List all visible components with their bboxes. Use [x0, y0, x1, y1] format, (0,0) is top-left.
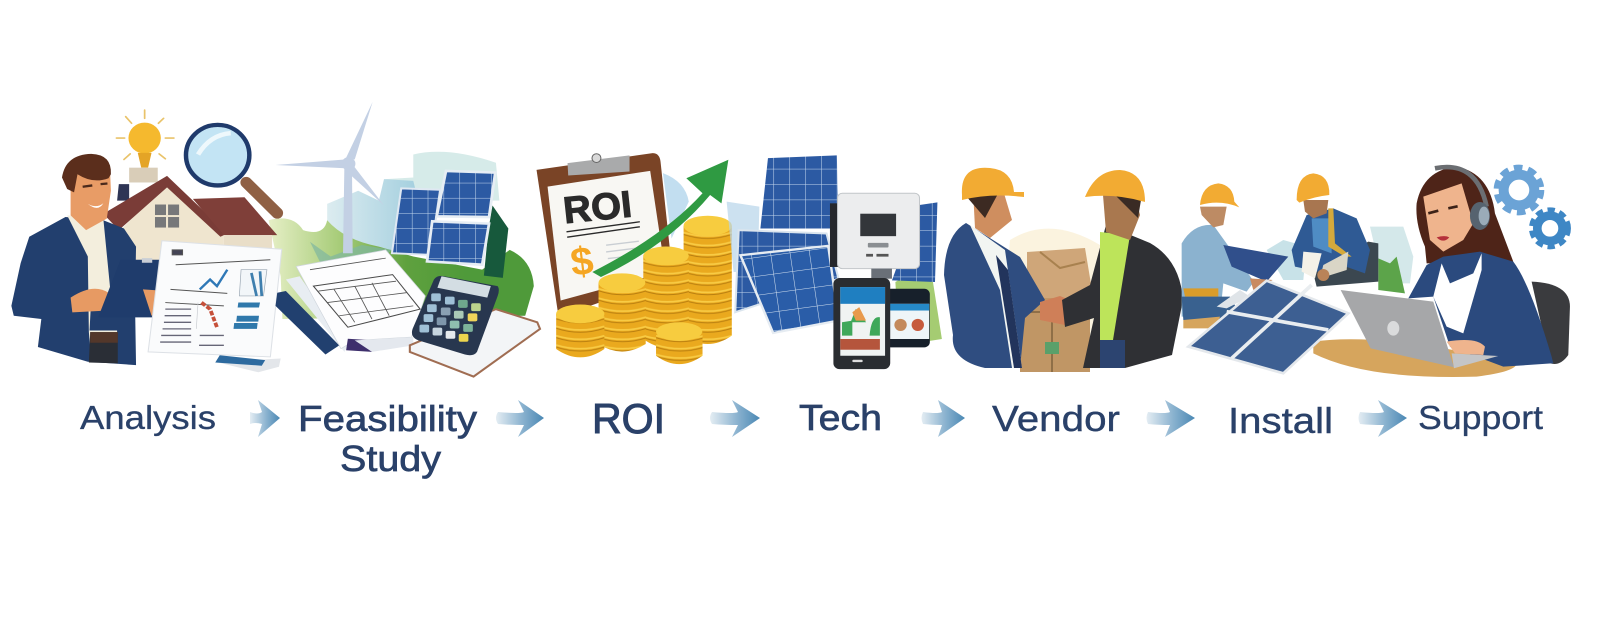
arrow 1	[250, 400, 280, 437]
panel: vendor illustration	[944, 168, 1183, 372]
label: Install: Install	[1228, 400, 1333, 441]
icon: light bulb sun	[116, 110, 174, 168]
icon: magnifying glass	[186, 125, 277, 213]
solar panel on table	[1188, 281, 1348, 373]
panel: analysis and feasibility illustrations	[11, 102, 540, 377]
handshake	[1040, 296, 1082, 325]
arrow 6	[1358, 400, 1407, 437]
smartphone with dashboard	[833, 278, 890, 369]
man in suit with hard hat	[944, 168, 1045, 368]
round wooden table	[1183, 317, 1517, 377]
woman with headset	[1408, 167, 1553, 367]
background wash	[1000, 229, 1100, 360]
panel: ROI illustration	[537, 153, 732, 364]
feasibility landscape	[269, 152, 534, 319]
arrow 2	[496, 400, 544, 437]
icon: man with clipboard	[11, 154, 174, 365]
label: Support: Support	[1418, 399, 1543, 436]
panel: tech illustration	[727, 155, 942, 369]
laptop	[1341, 290, 1498, 368]
blueprint book stack	[276, 250, 425, 355]
label: Vendor: Vendor	[992, 398, 1120, 439]
panel: install and support illustrations	[1182, 167, 1570, 377]
label: Analysis: Analysis	[80, 399, 216, 436]
label: Feasibility Study	[298, 398, 477, 479]
label: ROI: ROI	[592, 395, 665, 442]
green growth arrow	[592, 160, 728, 277]
label: Feasibility Study: Study	[340, 438, 441, 479]
icon: house	[103, 168, 277, 263]
office chair	[1532, 282, 1570, 364]
coin stacks	[556, 216, 732, 364]
small monitoring device	[885, 289, 930, 347]
man in dark jacket with hard hat	[1062, 170, 1183, 368]
icon: wind turbine	[276, 102, 384, 253]
solar panel array	[727, 155, 942, 346]
inverter box	[830, 193, 920, 279]
clipboard with ROI document	[537, 153, 689, 316]
cardboard boxes	[1020, 248, 1092, 372]
icon: calculator on notebook	[410, 276, 540, 377]
label: Feasibility Study: Feasibility	[298, 398, 477, 439]
icon: gears	[1496, 167, 1569, 247]
worker crouching with papers	[1292, 173, 1378, 287]
dollar sign: $	[568, 239, 596, 285]
icon: solar panels	[392, 171, 508, 278]
arrow 5	[1146, 400, 1195, 437]
ROI title: ROI	[561, 184, 634, 232]
landscape background	[1267, 227, 1413, 293]
worker kneeling with tablet	[1182, 183, 1288, 320]
arrow 4	[922, 400, 965, 437]
report document	[148, 241, 282, 372]
arrow 3	[710, 400, 760, 437]
label: Tech: Tech	[799, 397, 882, 438]
